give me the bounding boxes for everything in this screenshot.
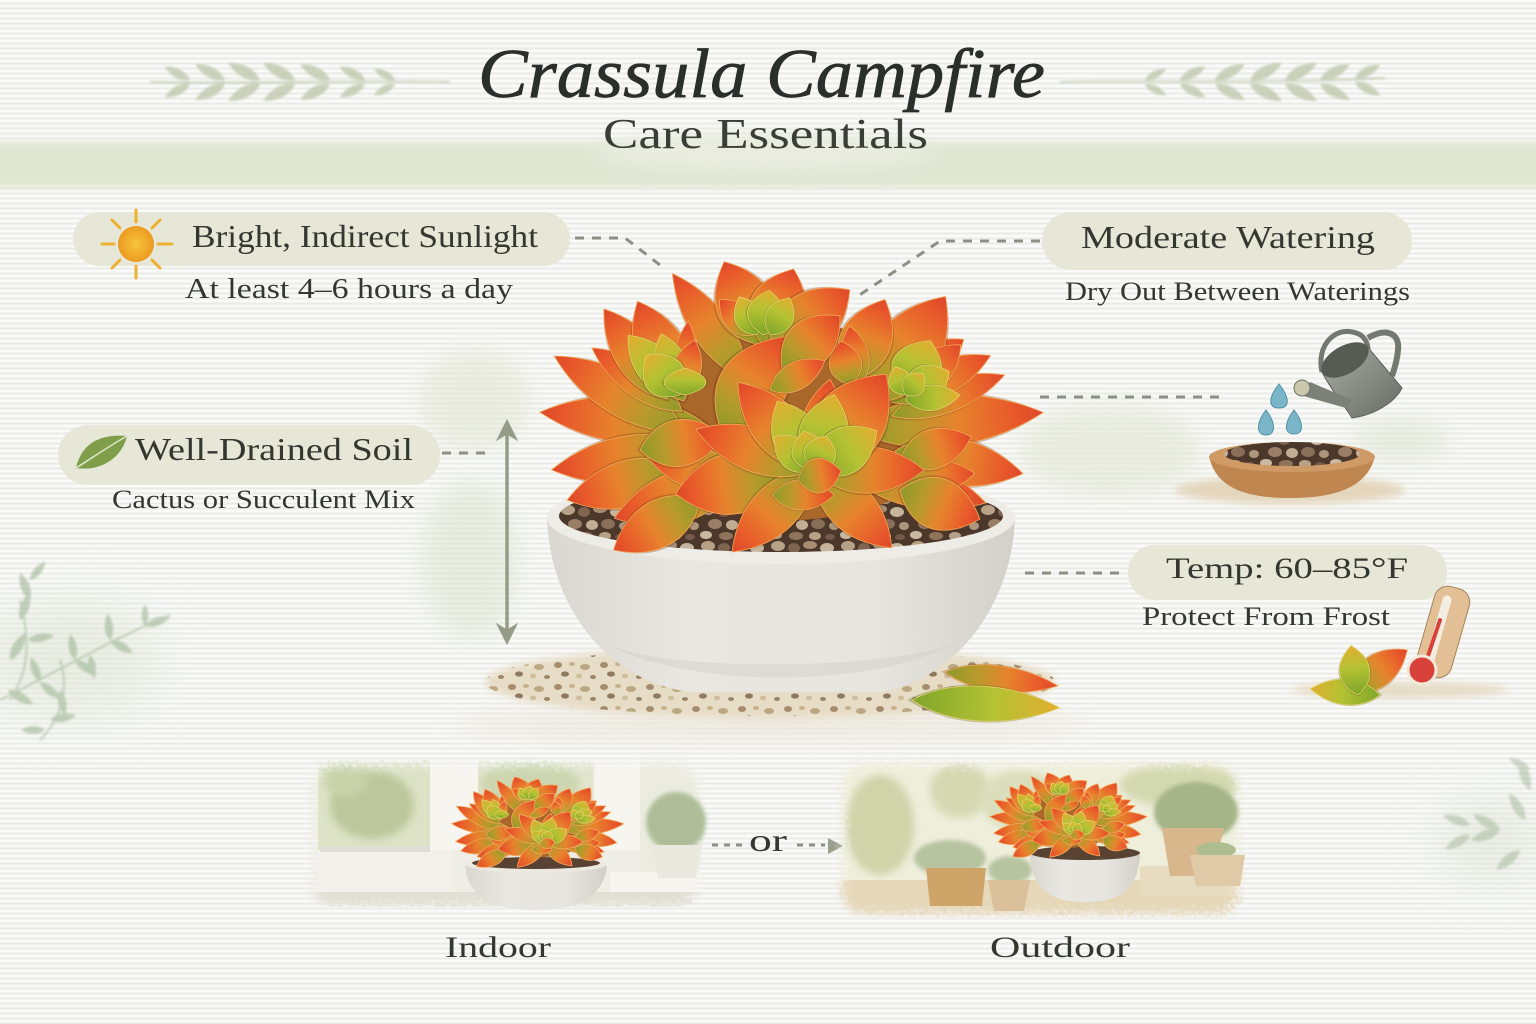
window frames bbox=[430, 757, 640, 850]
fallen leaves bbox=[907, 658, 1061, 727]
callout: watering: Moderate Watering bbox=[1081, 219, 1375, 255]
callout: soil: Cactus or Succulent Mix bbox=[112, 485, 415, 514]
indoor succulent bbox=[451, 773, 625, 910]
watering illustration bbox=[1175, 331, 1405, 504]
small potted plant bbox=[646, 792, 706, 878]
icon: fallen leaves bbox=[1309, 635, 1417, 709]
decorative sprig right of title bbox=[1060, 58, 1385, 106]
callout: sunlight: Bright, Indirect Sunlight bbox=[192, 218, 538, 254]
callout: sunlight: At least 4–6 hours a day bbox=[185, 274, 513, 305]
subtitle: Care Essentials bbox=[603, 112, 928, 158]
callout: soil bbox=[58, 425, 440, 514]
window view bbox=[318, 760, 430, 850]
callout: temperature: Temp: 60–85°F bbox=[1166, 552, 1408, 585]
callout: watering: Dry Out Between Waterings bbox=[1065, 277, 1410, 306]
callout: temperature: Protect From Frost bbox=[1142, 602, 1391, 631]
watercolor washes bbox=[0, 350, 1536, 880]
icon: soil dish bbox=[1175, 442, 1405, 504]
temperature illustration bbox=[1290, 583, 1510, 709]
callout: watering bbox=[1042, 212, 1412, 306]
gravel around pot bbox=[485, 646, 1055, 718]
decorative sprig left of title bbox=[150, 58, 450, 106]
icon: leaf bbox=[76, 436, 127, 469]
arrow: height double arrow bbox=[497, 420, 517, 644]
title band bbox=[0, 132, 1536, 188]
label: indoor: Indoor bbox=[445, 931, 551, 964]
foliage: bottom right branch bbox=[1441, 755, 1535, 874]
dashed connectors bbox=[442, 238, 1225, 573]
callout: temperature bbox=[1128, 545, 1447, 631]
icon: thermometer bbox=[1408, 583, 1473, 684]
icon: water drops bbox=[1258, 384, 1302, 435]
succulent plant bbox=[537, 249, 1046, 572]
foliage: bottom left branch bbox=[0, 559, 171, 740]
callout: soil: Well-Drained Soil bbox=[135, 431, 413, 467]
label: or with arrows bbox=[712, 822, 843, 858]
pot bbox=[547, 472, 1015, 692]
icon: sun bbox=[102, 210, 172, 278]
small pots bbox=[914, 782, 1245, 911]
panel: outdoor scene bbox=[835, 757, 1245, 917]
label: outdoor: Outdoor bbox=[990, 931, 1130, 964]
icon: watering can bbox=[1294, 331, 1402, 418]
outdoor succulent bbox=[989, 769, 1148, 902]
label: or with arrows: or bbox=[749, 822, 787, 858]
title: Crassula Campfire bbox=[478, 36, 1045, 113]
callout: sunlight bbox=[73, 210, 570, 305]
panel: indoor scene bbox=[305, 757, 706, 910]
